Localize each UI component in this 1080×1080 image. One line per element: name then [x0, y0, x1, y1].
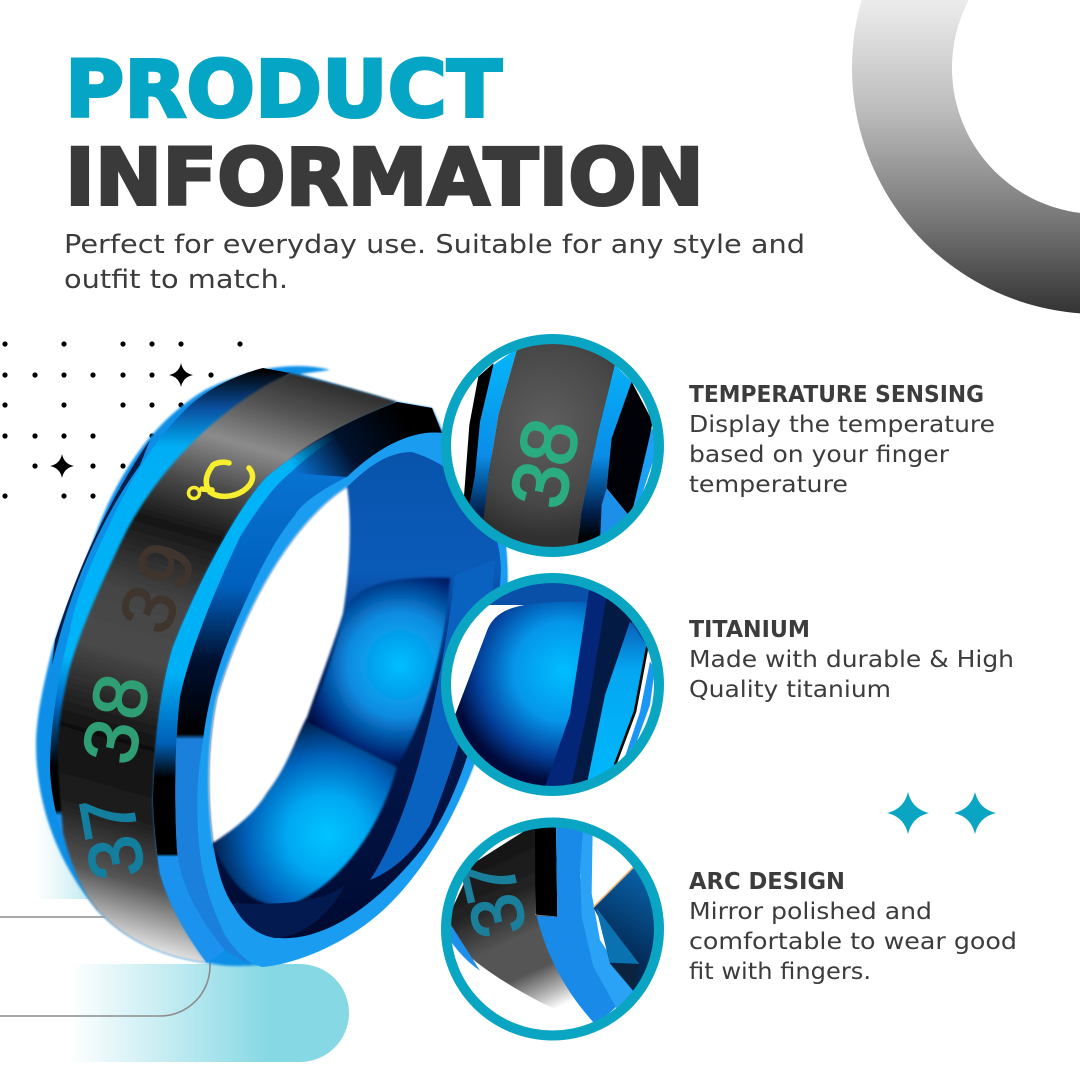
circle backing — [446, 823, 658, 1035]
icon: degree celsius mark — [188, 462, 253, 498]
ring: temperature band — [58, 373, 397, 963]
ring illustration — [36, 366, 507, 967]
feature: titanium: TITANIUM — [689, 615, 810, 643]
icon: black sparkle top — [169, 363, 193, 387]
background teal fade block — [30, 800, 100, 899]
ring: white opening — [209, 487, 350, 843]
magnified digits 38: 38 — [493, 412, 596, 515]
circle border — [446, 578, 659, 791]
feature: arc design: comfortable to wear good — [689, 927, 1017, 955]
magnified arc contents — [446, 823, 660, 1023]
subtitle — [64, 230, 805, 295]
ring: outer silhouette — [36, 366, 507, 966]
magnified digits 37: 37 — [446, 854, 542, 945]
zoom circle: arc design — [446, 822, 660, 1036]
magnified interior contents — [455, 578, 657, 792]
ring: interior — [209, 452, 501, 938]
icon: teal sparkles — [887, 792, 996, 834]
feature: temperature sensing: TEMPERATURE SENSING — [689, 380, 984, 408]
ring: left bevel strip — [50, 368, 290, 910]
feature: arc design: ARC DESIGN — [689, 867, 845, 895]
ring: strip right of band — [153, 402, 397, 963]
ring: dark outer sliver — [52, 440, 150, 665]
magnified ring contents — [464, 344, 654, 547]
feature: temperature sensing — [689, 380, 995, 498]
teal pill — [70, 964, 349, 1062]
circle border — [446, 822, 659, 1036]
dot grid — [2, 341, 243, 499]
feature: titanium: Quality titanium — [689, 675, 891, 703]
ring digit: 37: 37 — [64, 791, 160, 885]
ring digit: 39: 39 — [102, 526, 214, 644]
ring: interior highlight lower — [213, 722, 397, 905]
zoom circle: temperature digits — [446, 335, 659, 558]
feature: arc design — [689, 867, 1017, 985]
ring: inner lower dark lip — [232, 885, 345, 938]
circle backing — [446, 340, 658, 552]
title line: PRODUCT: PRODUCT — [65, 46, 502, 136]
feature: arc design: Mirror polished and — [689, 897, 932, 925]
ring: front rim — [197, 433, 507, 967]
decorative gradient arc — [852, 0, 1080, 314]
feature: titanium — [689, 615, 1014, 703]
subtitle: outfit to match. — [64, 265, 288, 295]
feature: arc design: fit with fingers. — [689, 957, 871, 985]
title line: INFORMATION: INFORMATION — [65, 134, 704, 224]
ring: second bevel strip — [175, 402, 442, 965]
ring digit: 38: 38 — [66, 664, 166, 770]
circle backing — [446, 578, 658, 790]
ring: black top right facet — [267, 402, 442, 477]
outline rounded line — [0, 917, 210, 1016]
title — [65, 46, 704, 224]
feature: titanium: Made with durable & High — [689, 645, 1014, 673]
feature: temperature sensing: based on your finger — [689, 440, 949, 468]
zoom circle: titanium interior — [446, 578, 659, 792]
subtitle: Perfect for everyday use. Suitable for any style and — [64, 230, 805, 260]
feature: temperature sensing: temperature — [689, 470, 848, 498]
feature: temperature sensing: Display the temperature — [689, 410, 995, 438]
icon: black sparkle bottom — [50, 454, 74, 478]
ring: interior highlight upper — [307, 578, 450, 767]
circle border — [446, 339, 659, 552]
ring: interior right bright strip — [370, 560, 495, 880]
